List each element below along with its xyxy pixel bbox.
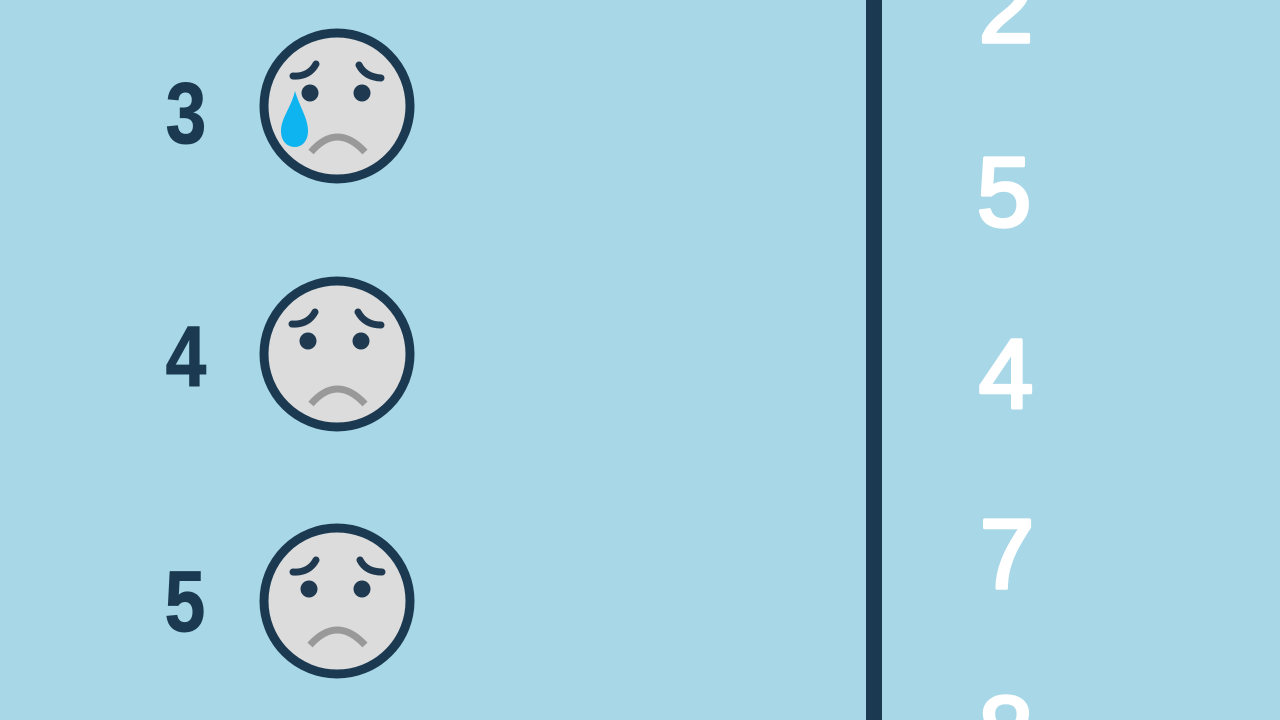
number 7: 7 (980, 499, 1034, 609)
number 4: 4 (979, 319, 1033, 429)
vertical divider bar (866, 0, 882, 720)
left number 5: 5 (165, 553, 205, 649)
right column numbers (977, 0, 1034, 720)
icon: blue tear drop (281, 91, 308, 147)
icon: sad face (264, 528, 410, 674)
left number 3: 3 (166, 65, 206, 161)
icon: crying sad face (264, 33, 410, 179)
number 5: 5 (977, 137, 1031, 247)
left number 4: 4 (166, 308, 206, 404)
icon: sad face (264, 281, 410, 427)
